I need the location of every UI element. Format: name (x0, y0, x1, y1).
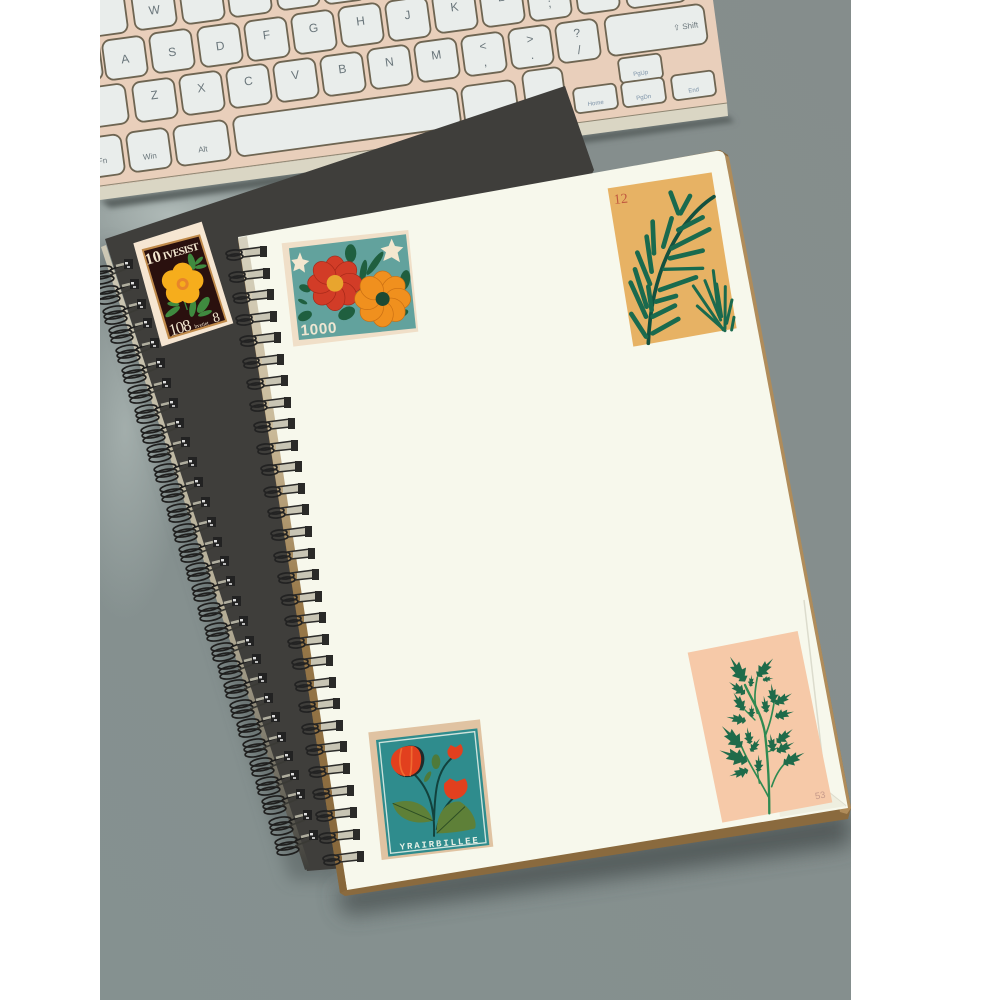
keys: H (355, 14, 366, 29)
keys: Fn (97, 156, 108, 166)
keys: F (262, 28, 271, 42)
keys: ? (573, 26, 581, 40)
keys: A (120, 52, 130, 66)
stamp: dark yellow flower: 10 (143, 248, 163, 269)
keys: > (526, 32, 534, 46)
notebook pages (238, 151, 848, 890)
herb leaves (720, 656, 804, 778)
keys: K (450, 0, 459, 15)
keys: N (384, 55, 395, 70)
keys: D (215, 38, 226, 54)
keyboard (57, 0, 735, 208)
keys: End (688, 87, 700, 95)
stamp: dark yellow flower: hvetiet (194, 320, 210, 330)
herb stems (742, 677, 785, 813)
black notebook cover (105, 86, 594, 871)
tulip stems (415, 757, 457, 837)
keys: X (196, 81, 206, 96)
white notebook shadow (335, 810, 851, 915)
keys: . (529, 48, 535, 62)
keys: / (577, 43, 582, 57)
black notebook spiral binding (90, 259, 318, 856)
tulip leaves (393, 754, 476, 833)
keys (57, 0, 717, 181)
white notebook spiral binding (226, 246, 364, 866)
stamp: teal red and orange flowers (282, 230, 418, 347)
stamp: dark yellow flower (133, 222, 233, 347)
stamp: teal red tulips: YRAIRBILLEE (399, 836, 479, 853)
keys: M (430, 47, 442, 63)
keys: Home (587, 100, 605, 108)
stamp: dark yellow flower: 108 (167, 315, 194, 340)
keys: , (482, 55, 488, 69)
keys: < (479, 39, 487, 53)
notebook back cover edge (238, 150, 851, 896)
stamp: teal red and orange flowers: 1000 (300, 320, 337, 340)
stars (291, 252, 309, 273)
orange flower (355, 271, 411, 327)
stamp: orange rosemary (608, 172, 737, 347)
black notebook page strip (101, 245, 310, 870)
keys: PgUp (633, 70, 649, 78)
stamp: teal red tulips (368, 719, 493, 860)
keys: B (337, 62, 347, 77)
yellow flower (162, 262, 204, 304)
keys: W (148, 2, 161, 18)
rosemary stems and leaves (631, 193, 714, 343)
keys: J (404, 8, 411, 22)
stamp: peach herb: 53 (814, 790, 826, 801)
red tulips (391, 744, 468, 799)
stamp: dark yellow flower: IVESIST (162, 242, 201, 263)
stamp: orange rosemary: 12 (613, 192, 629, 208)
keys: Z (150, 88, 159, 102)
keys: ⇧ Shift (673, 20, 700, 33)
white notebook (238, 150, 851, 896)
stamp: dark yellow flower: 8 (211, 310, 222, 326)
red flower (308, 256, 362, 311)
keys: S (167, 45, 177, 59)
small rosemary (693, 271, 734, 331)
keys: Alt (198, 144, 209, 155)
leaves (164, 253, 213, 319)
left page edge strip (238, 236, 347, 893)
leaves and stems (296, 244, 412, 323)
keys: C (243, 73, 254, 89)
keys: Win (142, 151, 157, 162)
black notebook shadow (100, 240, 345, 880)
stamp: peach herb (688, 631, 832, 823)
keys: V (290, 68, 300, 83)
keys: G (308, 20, 319, 36)
page stack edge (804, 600, 846, 806)
keys: PgDn (636, 94, 652, 102)
